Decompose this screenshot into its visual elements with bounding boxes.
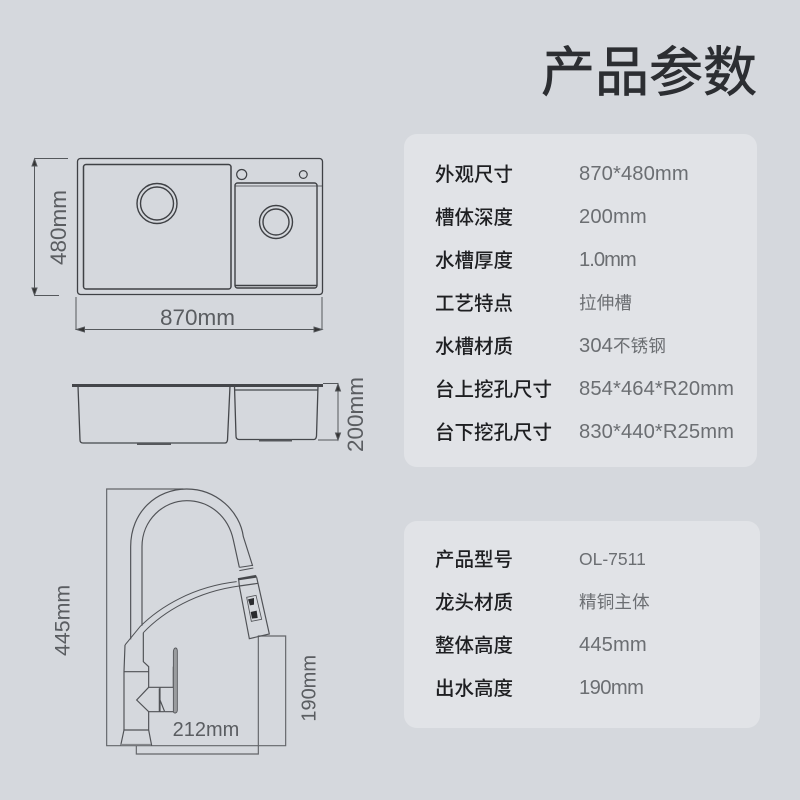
pull-out spray head (239, 577, 269, 639)
hose collar (238, 565, 256, 579)
dimension: 190mm: 190mm (298, 655, 320, 722)
dimension: 445mm: 445mm (50, 585, 74, 656)
dimension: 870mm (76, 297, 322, 332)
row: sink material: 304不锈钢 (579, 335, 666, 357)
row: sink material (435, 330, 666, 359)
row: sink thickness: 1.0mm (579, 249, 636, 271)
row: undermount cutout: 台下挖孔尺寸 (435, 416, 552, 445)
row: sink thickness: 水槽厚度 (435, 244, 513, 273)
row: top-mount cutout (435, 373, 734, 402)
row: top-mount cutout: 台上挖孔尺寸 (435, 373, 552, 402)
row: spout height (435, 672, 643, 701)
row: exterior size: 870*480mm (579, 163, 689, 185)
left basin profile (78, 386, 230, 443)
row: faucet material (435, 586, 650, 615)
height guide lines (107, 489, 286, 754)
row: overall height: 445mm (579, 634, 647, 656)
dimension: 480mm (32, 158, 71, 296)
row: sink material: 水槽材质 (435, 330, 513, 359)
row: basin depth (435, 201, 647, 230)
row: basin depth: 200mm (579, 206, 647, 228)
left basin (84, 164, 231, 289)
dimension: 212mm: 212mm (173, 719, 239, 741)
row: craft: 拉伸槽 (579, 293, 632, 313)
faucet arm (125, 582, 239, 645)
sink outline (78, 158, 322, 294)
row: exterior size: 外观尺寸 (435, 158, 513, 187)
spout neck (131, 489, 253, 639)
row: craft (435, 287, 632, 316)
left drain (137, 184, 177, 224)
dimension: 200mm (318, 377, 368, 452)
row: model number: 产品型号 (435, 543, 513, 572)
dimension: 480mm: 480mm (46, 190, 71, 265)
row: craft: 工艺特点 (435, 287, 513, 316)
row: overall height: 整体高度 (435, 629, 513, 658)
row: sink thickness (435, 244, 636, 273)
row: spout height: 190mm (579, 677, 643, 699)
faucet body (121, 633, 152, 746)
right basin profile (234, 386, 318, 440)
spray head buttons (247, 595, 262, 621)
right drain (260, 206, 292, 238)
row: exterior size (435, 158, 689, 187)
row: undermount cutout: 830*440*R25mm (579, 421, 734, 443)
diagram: sink side view (72, 377, 368, 452)
row: undermount cutout (435, 416, 734, 445)
panel: sink specifications (404, 134, 757, 467)
faucet handle (137, 648, 177, 713)
row: model number (435, 543, 646, 572)
row: faucet material: 精铜主体 (579, 592, 650, 612)
diagram: faucet side view (50, 489, 320, 754)
dimension: 870mm: 870mm (160, 305, 235, 330)
diagram: sink top view (32, 158, 322, 332)
panel: faucet specifications (404, 521, 760, 728)
row: model number: OL-7511 (579, 549, 646, 569)
row: overall height (435, 629, 647, 658)
dimension: 200mm: 200mm (343, 377, 368, 452)
tap holes (237, 170, 307, 180)
row: top-mount cutout: 854*464*R20mm (579, 378, 734, 400)
rim (72, 384, 323, 387)
row: faucet material: 龙头材质 (435, 586, 513, 615)
drains (137, 440, 292, 444)
title: 产品参数 (541, 28, 757, 107)
row: basin depth: 槽体深度 (435, 201, 513, 230)
right basin (235, 183, 322, 288)
row: spout height: 出水高度 (435, 672, 513, 701)
